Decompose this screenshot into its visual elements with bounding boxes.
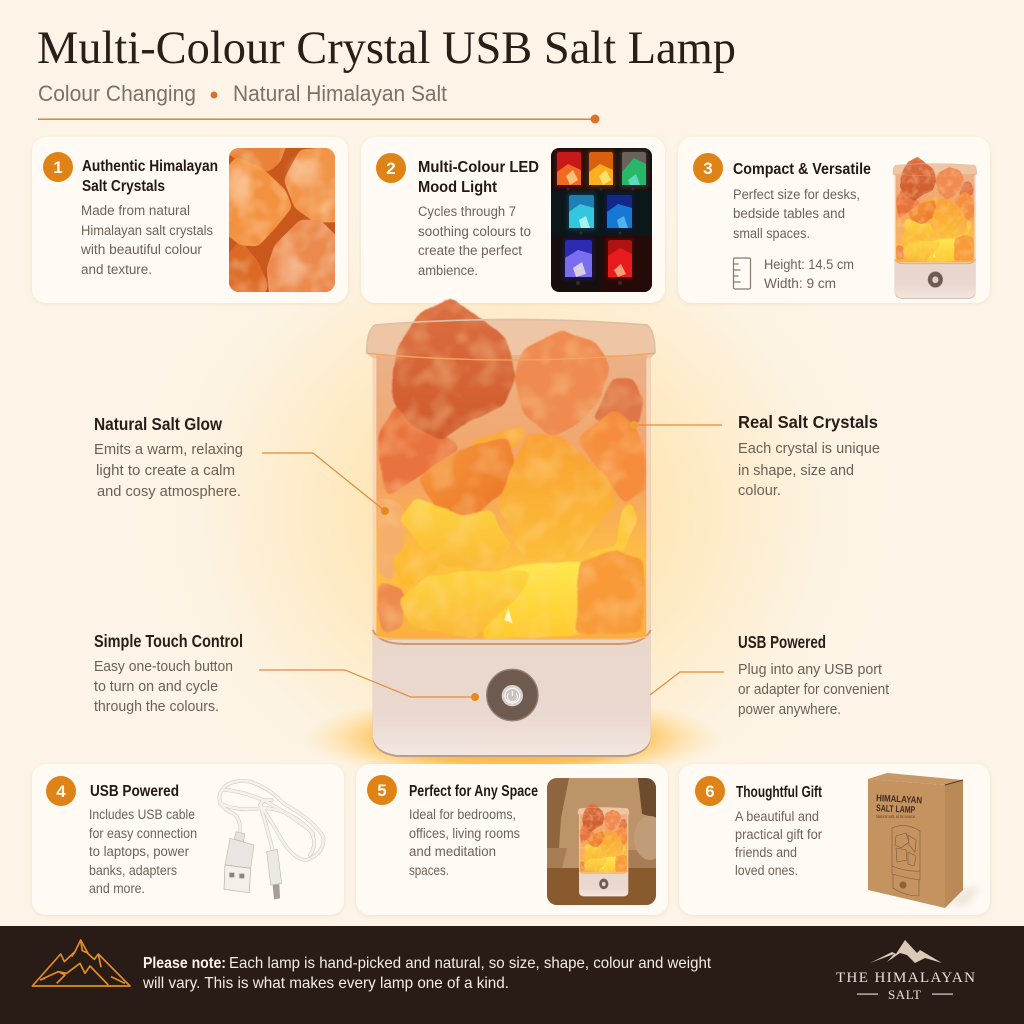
callout: real salt crystals: Real Salt Crystals (738, 412, 878, 432)
panel: LED mood light (361, 137, 665, 303)
body 1: and texture. (81, 262, 152, 277)
body 3: bedside tables and (733, 206, 845, 221)
body 1 (80, 203, 213, 277)
body 2: Cycles through 7 (418, 204, 516, 219)
panel: perfect for any space (356, 764, 668, 915)
callout: simple touch control: to turn on and cycle (94, 678, 218, 695)
badge 5: 5 (377, 781, 387, 800)
callout: simple touch control: Simple Touch Control (94, 631, 243, 651)
logo: THE HIMALAYAN (836, 970, 975, 986)
badge 4: 4 (56, 782, 66, 801)
body 5: and meditation (409, 844, 496, 859)
heading 1 (82, 158, 218, 195)
body 6: practical gift for (735, 827, 822, 842)
body 5 (409, 807, 520, 878)
badge 2 (376, 153, 406, 183)
body 1: Made from natural (81, 203, 190, 218)
heading 2: Multi-Colour LED (418, 159, 539, 176)
subtitle: Natural Himalayan Salt (233, 81, 447, 106)
callout: simple touch control: Easy one-touch button (94, 658, 233, 675)
body 2: create the perfect (418, 243, 522, 258)
body 1: with beautiful colour (80, 242, 203, 257)
safety note: will vary. This is what makes every lamp one of a kind. (142, 975, 509, 992)
body 2: ambience. (418, 263, 478, 278)
logo (836, 940, 975, 1002)
dimensions (764, 257, 854, 291)
panel: thoughtful gift (679, 764, 990, 915)
badge 3: 3 (703, 159, 713, 178)
body 4 (89, 807, 197, 896)
image: small lamp (893, 157, 977, 299)
dimensions: Width: 9 cm (764, 276, 836, 291)
icon: mountain outline (32, 940, 130, 986)
callout: real salt crystals: colour. (738, 482, 781, 499)
heading 1: Salt Crystals (82, 178, 165, 195)
body 6: A beautiful and (735, 809, 819, 824)
callout: USB powered: or adapter for convenient (738, 681, 890, 698)
callout: USB powered: USB Powered (738, 632, 826, 652)
safety note: Each lamp is hand-picked and natural, so size, shape, colour and weight (229, 955, 712, 972)
safety note (142, 955, 712, 992)
callout: natural salt glow: and cosy atmosphere. (97, 483, 241, 500)
heading 4: USB Powered (90, 783, 179, 800)
image: USB cable (219, 781, 323, 899)
icon: ruler (734, 258, 750, 289)
callout: USB powered: power anywhere. (738, 701, 841, 718)
heading 5: Perfect for Any Space (409, 783, 538, 800)
badge 6: 6 (705, 782, 715, 801)
image: seven colour lamps (551, 148, 652, 292)
body 2 (418, 204, 531, 278)
badge 4 (46, 776, 76, 806)
body 5: spaces. (409, 863, 449, 878)
body 4: and more. (89, 881, 145, 896)
under-lamp glow (300, 694, 724, 782)
badge 1: 1 (53, 158, 63, 177)
callout: natural salt glow: light to create a calm (96, 462, 235, 479)
callout: real salt crystals: Each crystal is unique (738, 440, 880, 457)
callout: natural salt glow: Natural Salt Glow (94, 414, 222, 434)
subtitle: Colour Changing (38, 81, 196, 106)
body 5: Ideal for bedrooms, (409, 807, 516, 822)
heading 1: Authentic Himalayan (82, 158, 218, 175)
body 1: Himalayan salt crystals (81, 223, 213, 238)
badge 5 (367, 775, 397, 805)
title rule (38, 114, 600, 124)
callout: simple touch control (94, 631, 479, 715)
body 6: friends and (735, 845, 797, 860)
badge 1 (43, 152, 73, 182)
lamp glow (132, 170, 892, 850)
body 3: small spaces. (733, 226, 810, 241)
image: gift box: SALT LAMP (876, 803, 916, 816)
heading 2 (418, 159, 539, 196)
body 4: Includes USB cable (89, 807, 195, 822)
body 6: loved ones. (735, 863, 798, 878)
heading 2: Mood Light (418, 179, 497, 196)
image: gift box: HIMALAYAN (876, 793, 922, 806)
footer band (0, 926, 1024, 1024)
logo: SALT (888, 987, 921, 1002)
body 3 (733, 187, 860, 241)
body 2: soothing colours to (418, 224, 531, 239)
image: gift box (868, 773, 980, 908)
body 3: Perfect size for desks, (733, 187, 860, 202)
body 4: to laptops, power (89, 844, 189, 859)
heading 3: Compact & Versatile (733, 161, 871, 178)
panel: authentic crystals (32, 137, 348, 303)
badge 3 (693, 153, 723, 183)
image: salt crystals (229, 148, 335, 292)
image: gift box: Natural salt, at its source (876, 814, 915, 819)
callout: natural salt glow: Emits a warm, relaxing (94, 441, 243, 458)
badge 2: 2 (386, 159, 396, 178)
callout: USB powered (650, 632, 890, 718)
body 4: banks, adapters (89, 863, 177, 878)
dimensions: Height: 14.5 cm (764, 257, 854, 272)
panel: USB cable (32, 764, 344, 915)
callout: USB powered: Plug into any USB port (738, 661, 883, 678)
image: lamp in room (547, 778, 666, 905)
callout: real salt crystals: in shape, size and (738, 462, 854, 479)
safety note: Please note: (143, 955, 226, 972)
callout: simple touch control: through the colours. (94, 698, 219, 715)
badge 6 (695, 776, 725, 806)
body 4: for easy connection (89, 826, 197, 841)
panel: compact and versatile (678, 137, 990, 303)
body 6 (735, 809, 822, 878)
heading 6: Thoughtful Gift (736, 784, 822, 801)
callout: real salt crystals (630, 412, 880, 499)
callout: natural salt glow (94, 414, 389, 515)
subtitle (38, 81, 447, 106)
body 5: offices, living rooms (409, 826, 520, 841)
title: Multi-Colour Crystal USB Salt Lamp (37, 22, 736, 74)
main lamp illustration (367, 298, 655, 757)
